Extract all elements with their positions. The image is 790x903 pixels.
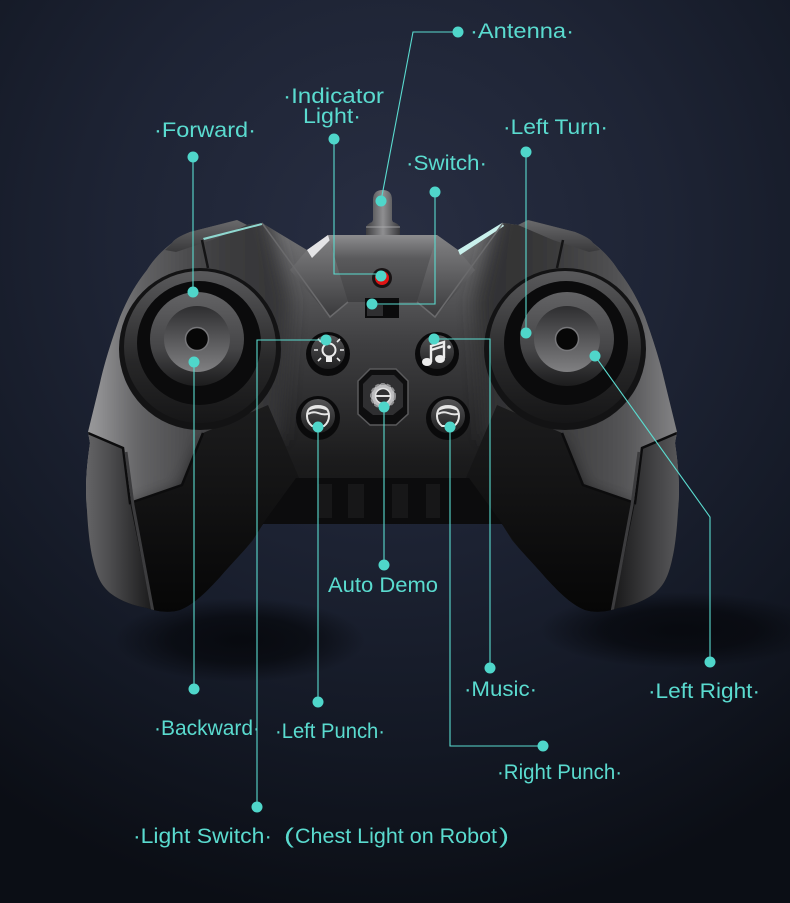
left joystick [119, 268, 281, 430]
callout: Light Switch [133, 334, 509, 848]
callout: Switch: ·Switch· [406, 152, 487, 175]
antenna [366, 190, 400, 237]
controller [86, 190, 679, 612]
callout: Right Punch: ·Right Punch· [497, 761, 622, 784]
callout: Left Right [590, 350, 760, 703]
callout: Left Punch [275, 422, 385, 743]
shoulder bumpers [165, 220, 247, 252]
left lower grip [86, 432, 151, 609]
callout: Antenna [376, 20, 574, 206]
callout: Right Punch [444, 422, 622, 784]
left dark panel [130, 405, 286, 611]
callout: Auto Demo: Auto Demo [328, 574, 438, 597]
right dark panel [480, 405, 635, 607]
callout: Indicator Light: ·Indicator [283, 85, 384, 108]
callout: Indicator Light: Light· [303, 105, 361, 128]
callout: Antenna: ·Antenna· [470, 20, 574, 43]
left upper shell [86, 220, 295, 509]
callout: Left Right: ·Left Right· [648, 680, 760, 703]
callout: Auto Demo [328, 402, 438, 597]
callout: Light Switch: ·Light Switch· [133, 825, 272, 848]
callout: Light Switch: Chest Light on Robot [295, 825, 497, 848]
body base [110, 220, 654, 604]
power switch [365, 298, 399, 318]
callout: Forward [154, 119, 256, 298]
button: music [415, 332, 459, 376]
top center plate [328, 235, 437, 302]
controller ground shadow [115, 592, 790, 682]
button: right punch [426, 396, 470, 440]
button: auto demo [358, 369, 408, 425]
callout: Light Switch: ) [499, 825, 509, 848]
vents [272, 478, 494, 516]
callout: Left Punch: ·Left Punch· [275, 720, 385, 743]
callout: Left Turn [503, 116, 608, 338]
right lower grip [614, 432, 679, 609]
grip seams [88, 433, 203, 503]
callout: Backward: ·Backward· [154, 717, 260, 740]
button: left punch [296, 396, 340, 440]
indicator light [372, 268, 392, 288]
callout: Backward [154, 356, 260, 740]
callout: Forward: ·Forward· [154, 119, 256, 142]
callout: Switch [366, 152, 487, 310]
button: light switch [306, 332, 350, 376]
right upper shell [468, 220, 679, 508]
callout: Left Turn: ·Left Turn· [503, 116, 608, 139]
center shoulder wedges [203, 223, 504, 317]
callout: Indicator Light [283, 85, 386, 282]
right joystick [484, 268, 646, 430]
callout: Music [428, 334, 537, 701]
callout: Music: ·Music· [464, 678, 537, 701]
callout: Light Switch: ( [284, 825, 294, 848]
